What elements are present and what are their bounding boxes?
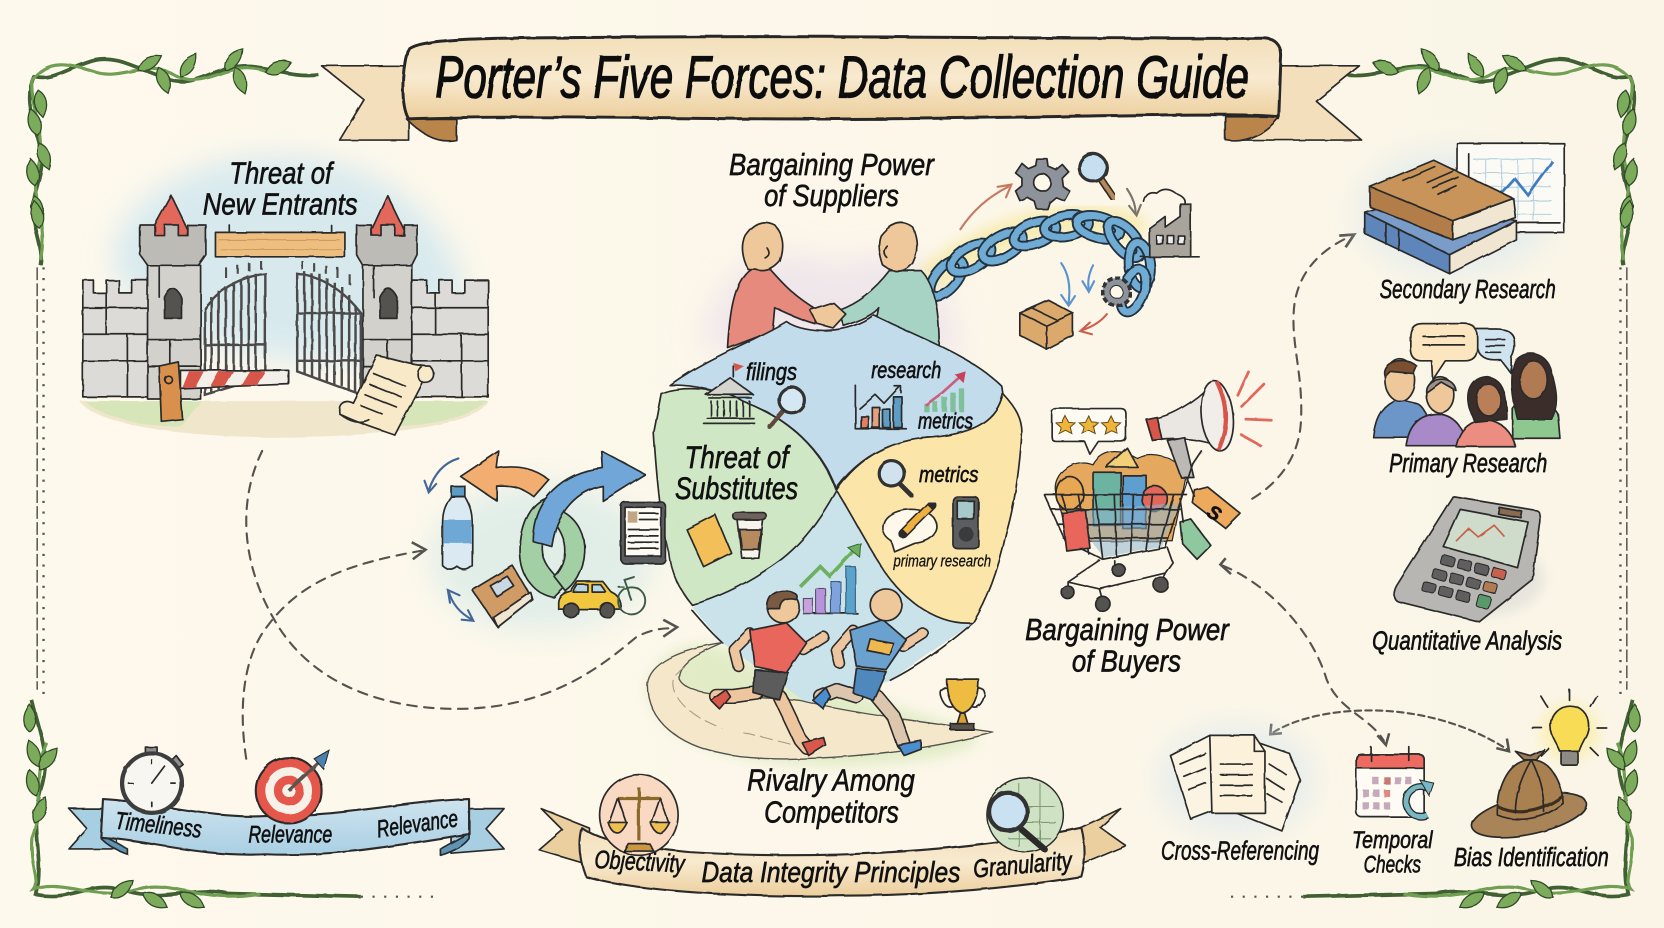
heading [1025, 612, 1230, 679]
cart frame [1068, 451, 1201, 601]
heading: threat of substitutes: Substitutes [675, 470, 798, 506]
label: Primary Research [1389, 450, 1547, 478]
panel: bias identification [1454, 690, 1609, 872]
arrow: dashed new entrants to rivalry [246, 451, 677, 709]
panel: blue ribbon with data principles [69, 747, 504, 855]
panel: primary research [1373, 324, 1560, 478]
segment: green [654, 389, 836, 605]
icon: brown book [472, 566, 533, 627]
heading: of Buyers [1072, 644, 1181, 679]
icon: voice recorder [953, 497, 978, 549]
icon: coffee cup [733, 513, 766, 558]
icon: water bottle [443, 486, 472, 570]
icon: documents [1171, 735, 1300, 831]
icon: factory [1141, 189, 1199, 257]
label: data integrity principles: Data Integrity Principles [701, 857, 960, 889]
right tower [371, 195, 404, 249]
chain [924, 211, 1152, 315]
label: segment words: metrics [919, 462, 978, 487]
vine border: bottom right [1303, 700, 1641, 912]
heading: of Suppliers [764, 178, 899, 213]
price tags [1193, 487, 1241, 528]
label: relevance: Relevance [248, 822, 332, 849]
people shaking hands [728, 222, 939, 348]
arrow: buyers to temporal checks [1220, 558, 1389, 745]
gates [205, 261, 361, 395]
arrow: buyers to secondary research [1252, 235, 1354, 499]
label: Bias Identification [1454, 844, 1609, 872]
chart: growth bars [800, 543, 861, 613]
panel: secondary research [1358, 143, 1564, 304]
segment: yellow [836, 394, 1022, 623]
icon: government building [704, 363, 755, 423]
megaphone [1146, 382, 1223, 448]
icon: gear [1016, 159, 1070, 209]
rays [1237, 371, 1271, 446]
label: timeliness: Timeliness [114, 808, 203, 844]
icon: stopwatch [122, 747, 183, 813]
icon: calendar [1356, 747, 1434, 817]
label: relevance right: Relevance [375, 805, 460, 843]
chart: growth paper [1457, 143, 1564, 232]
heading [203, 156, 358, 221]
icon: magnifier [1079, 154, 1113, 197]
icon: yellow book [687, 515, 731, 567]
barrier [180, 370, 289, 388]
vine border: top right [1346, 45, 1640, 265]
segment: bottom blue [692, 490, 973, 702]
icon: lightbulb [1532, 690, 1607, 765]
scroll [339, 355, 434, 435]
label: Checks [1364, 851, 1421, 878]
blue arrow [533, 451, 645, 547]
panel: threat of new entrants castle [80, 156, 488, 437]
icon: detective hat [1468, 749, 1590, 846]
heading: New Entrants [203, 186, 358, 221]
segment: top blue [670, 315, 1003, 488]
orange arrow [461, 451, 549, 501]
icon: stacked books [1365, 160, 1516, 274]
icon: scales [600, 775, 678, 855]
label: segment words: research [871, 357, 941, 383]
tag symbol: S [1203, 502, 1225, 526]
panel: bargaining power of buyers [1025, 371, 1271, 679]
icon: calculator [1394, 497, 1540, 622]
speech bubbles [1410, 324, 1515, 380]
sign [229, 225, 331, 233]
icon: trophy [940, 679, 985, 730]
runner: red shirt [711, 591, 826, 756]
green ring [520, 497, 566, 597]
icon: box [1020, 300, 1073, 349]
chart: research bars [855, 385, 906, 429]
icon: magnifier [769, 387, 804, 427]
heading: rivalry among competitors [747, 763, 915, 829]
people group [1373, 354, 1560, 447]
icon: target [256, 750, 329, 823]
cart basket [1044, 464, 1193, 559]
vine border: top left [24, 45, 318, 265]
walls [83, 280, 149, 397]
label: Secondary Research [1380, 276, 1556, 304]
road [647, 643, 993, 759]
groceries [1055, 452, 1186, 541]
arrow: dashed timeliness to substitutes [243, 542, 426, 759]
panel: central forces shield [647, 315, 1022, 829]
title banner [322, 37, 1362, 141]
stars bubble [1052, 409, 1126, 454]
heading: rivalry among competitors: Rivalry Among [747, 763, 915, 798]
chart: metrics bars [925, 371, 966, 412]
label: Temporal [1352, 827, 1433, 854]
heading: Bargaining Power [729, 147, 935, 182]
label [1352, 827, 1433, 878]
heading: threat of substitutes [675, 439, 798, 506]
icon: bicycle [618, 576, 645, 614]
icon: tablet [621, 502, 665, 563]
panel: data integrity ribbon [539, 775, 1126, 896]
icon: magnifier on data [987, 778, 1063, 852]
icon: small gear [1103, 278, 1130, 306]
vine border: bottom left [23, 700, 361, 912]
label: Cross-Referencing [1161, 838, 1319, 866]
icon: speech bubble and pencil [883, 505, 937, 552]
ground [80, 401, 488, 437]
heading: rivalry among competitors: Competitors [764, 794, 899, 829]
arrow: validation arc [1270, 710, 1509, 751]
arrows: small blue cycle [425, 458, 473, 621]
label: segment words [746, 357, 991, 571]
panel: substitutes illustration [425, 451, 665, 631]
panel: quantitative analysis [1372, 497, 1562, 655]
heading: Threat of [229, 156, 335, 191]
heading [729, 147, 935, 213]
arrows around suppliers [960, 185, 1141, 334]
icon: magnifier metrics [879, 461, 912, 496]
panel: bargaining power of suppliers [700, 147, 1199, 361]
heading: threat of substitutes: Threat of [684, 439, 791, 475]
label: segment words: primary research [893, 552, 991, 571]
runner: blue shirt [813, 589, 923, 756]
label: granularity: Granularity [972, 847, 1074, 884]
title text: Porter’s Five Forces: Data Collection Guide [435, 44, 1249, 111]
panel: temporal checks [1352, 747, 1434, 878]
heading: Bargaining Power [1025, 612, 1230, 647]
left tower [152, 195, 188, 249]
label: segment words: filings [746, 359, 797, 386]
icon: taxi [558, 582, 621, 618]
label: segment words: metrics [918, 409, 973, 434]
panel: cross-referencing [1160, 727, 1319, 866]
label: Quantitative Analysis [1372, 627, 1562, 655]
label: objectivity: Objectivity [594, 846, 686, 879]
